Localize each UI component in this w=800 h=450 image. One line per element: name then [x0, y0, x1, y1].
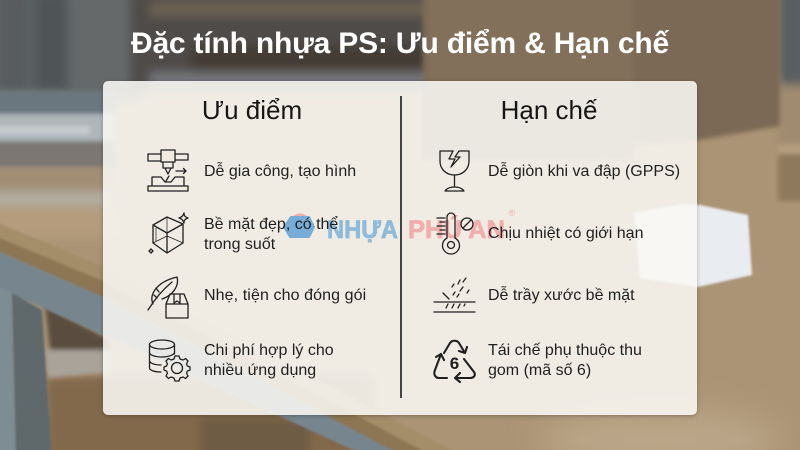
icon: fragile glass — [439, 150, 470, 192]
watermark logo — [283, 208, 516, 244]
text: recycling depends on collection: gom (mã số 6) — [488, 362, 591, 379]
text: beautiful surface — [204, 216, 338, 253]
icon: scratches — [433, 277, 476, 313]
text: reasonable cost: nhiều ứng dụng — [204, 362, 316, 379]
icon: recycling code 6: 6 — [450, 354, 459, 373]
watermark logo: ® — [509, 208, 516, 218]
watermark logo: PHÚ AN — [408, 214, 505, 244]
icon: feather and box — [147, 276, 189, 319]
text: easy to process: Dễ gia công, tạo hình — [204, 163, 356, 180]
text: limited heat resistance: Chịu nhiệt có giới hạn — [488, 225, 643, 242]
text: beautiful surface: trong suốt — [204, 236, 275, 253]
icon: recycling code 6 — [433, 340, 476, 384]
icon: transparent cube — [148, 212, 189, 254]
text: recycling depends on collection: Tái chế phụ thuộc thu — [488, 342, 642, 359]
text: brittle: Dễ giòn khi va đập (GPPS) — [488, 163, 680, 180]
icon: database and gear — [148, 339, 191, 382]
title: Đặc tính nhựa PS: Ưu điểm & Hạn chế — [131, 27, 669, 60]
panel: advantages and limitations — [103, 81, 697, 415]
column divider — [400, 96, 402, 398]
text: beautiful surface: Bề mặt đẹp, có thể — [204, 216, 338, 233]
text: scratches easily: Dễ trầy xước bề mặt — [488, 287, 635, 304]
icon: CNC forming — [147, 149, 189, 192]
heading: advantages: Ưu điểm — [202, 95, 302, 125]
watermark logo: NHỰA — [327, 216, 398, 244]
text: lightweight: Nhẹ, tiện cho đóng gói — [204, 287, 366, 304]
text: reasonable cost: Chi phí hợp lý cho — [204, 342, 334, 359]
icon: thermometer with limit — [436, 212, 474, 255]
heading: limitations: Hạn chế — [501, 95, 597, 125]
text: recycling depends on collection — [488, 342, 642, 379]
text: reasonable cost — [204, 342, 334, 379]
